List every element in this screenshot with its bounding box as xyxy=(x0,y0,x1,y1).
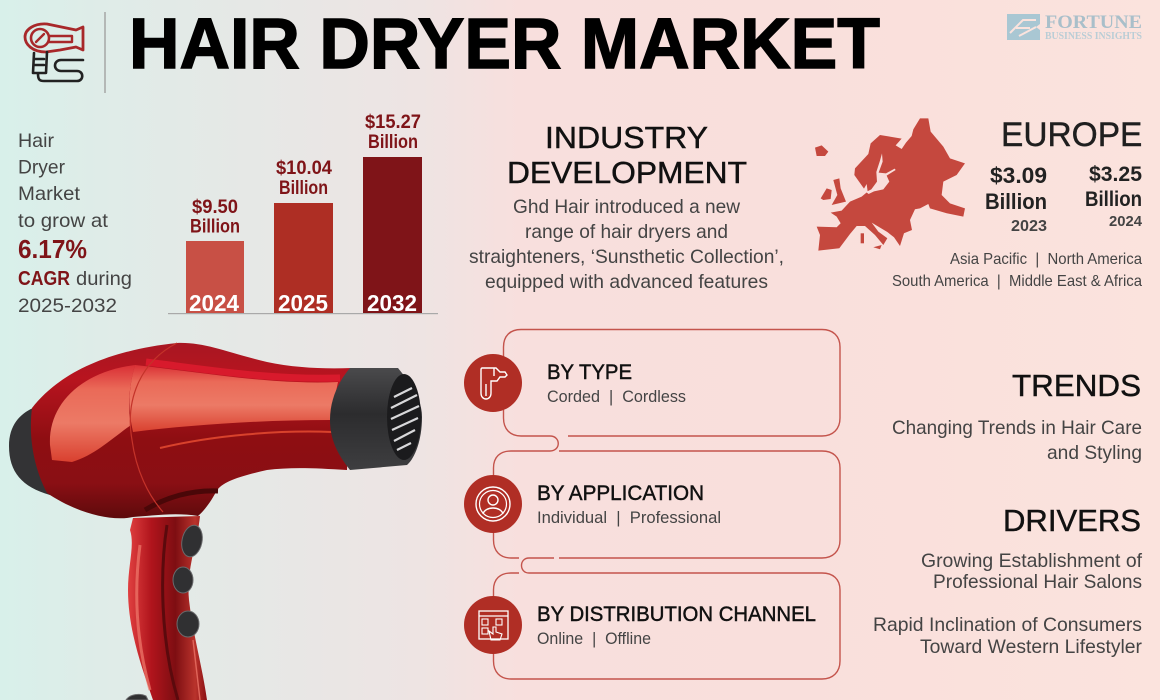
text block: CAGR statement: 2025-2032 xyxy=(18,295,117,317)
stat: Europe 2024: 2024 xyxy=(1109,213,1143,230)
icon: hair dryer logo xyxy=(25,24,83,81)
text block: CAGR statement: during xyxy=(76,268,132,290)
nozzle xyxy=(330,368,422,470)
text block: industry development description: Ghd Hair introduced a new xyxy=(513,196,741,218)
connected segment panels xyxy=(494,330,840,679)
text block: industry development description: range of hair dryers and xyxy=(525,221,728,243)
stat: Europe 2024 xyxy=(1085,163,1143,230)
text block: other regions: Asia Pacific | North America xyxy=(950,251,1142,268)
segment: by distribution channel xyxy=(464,596,816,654)
bar 2032: 2032 xyxy=(367,290,417,316)
panel: trends: and Styling xyxy=(1047,442,1142,464)
bar 2024: 2024 xyxy=(189,290,239,316)
text block: industry development description: equipped with advanced features xyxy=(485,271,768,293)
segment: by type: Corded | Cordless xyxy=(547,387,686,406)
panel: drivers: Toward Western Lifestyler xyxy=(920,636,1142,658)
text block: other regions xyxy=(892,251,1142,290)
illustration: red hair dryer xyxy=(9,343,422,700)
text block: CAGR statement: Market xyxy=(18,183,81,205)
bar 2032: $15.27 xyxy=(365,112,421,133)
heading: Europe: EUROPE xyxy=(1001,116,1142,154)
dryer body xyxy=(31,343,352,518)
bar 2025: $10.04 xyxy=(276,158,332,179)
bar 2025: Billion xyxy=(279,178,328,199)
text block: industry development description: straighteners, ‘Sunsthetic Collection’, xyxy=(469,246,784,268)
stat: Europe 2023: Billion xyxy=(985,189,1047,214)
bar 2024: $9.50 xyxy=(192,197,238,218)
stat: Europe 2023: $3.09 xyxy=(990,163,1047,188)
handle xyxy=(128,516,207,700)
bar 2025 xyxy=(274,158,333,316)
rear cap xyxy=(9,408,60,495)
panel: drivers: Rapid Inclination of Consumers xyxy=(873,614,1142,636)
segment: by type xyxy=(464,354,686,412)
text block: CAGR statement: CAGR xyxy=(18,268,70,290)
segment: by application: Individual | Professional xyxy=(537,508,721,527)
text block: CAGR statement: Dryer xyxy=(18,156,65,178)
heading: industry development: INDUSTRY xyxy=(545,120,708,155)
panel: drivers xyxy=(873,503,1143,658)
icon: corded dryer xyxy=(464,354,522,412)
text block: CAGR statement xyxy=(18,130,132,317)
logo: Fortune Business Insights: FORTUNE xyxy=(1045,12,1142,33)
map: Europe xyxy=(815,118,965,251)
text block: CAGR statement: to grow at xyxy=(18,210,109,232)
bar 2032 xyxy=(363,112,422,316)
bar 2024 xyxy=(186,197,244,316)
segment: by type: BY TYPE xyxy=(547,361,632,384)
segment: by distribution channel: Online | Offline xyxy=(537,629,651,648)
body reflections xyxy=(50,343,340,512)
title: HAIR DRYER MARKET xyxy=(129,4,880,83)
icon: online store grid xyxy=(464,596,522,654)
heading: industry development: DEVELOPMENT xyxy=(507,155,747,190)
panel: trends xyxy=(892,368,1142,464)
panel: trends: Changing Trends in Hair Care xyxy=(892,417,1142,439)
stat: Europe 2023 xyxy=(985,163,1047,235)
header divider xyxy=(104,12,106,93)
stat: Europe 2024: Billion xyxy=(1085,188,1142,211)
icon: person in circle xyxy=(464,475,522,533)
control buttons xyxy=(126,523,205,700)
logo: Fortune Business Insights xyxy=(1007,12,1142,42)
panel: drivers: Growing Establishment of xyxy=(921,550,1143,572)
bar 2025: 2025 xyxy=(278,290,328,316)
stat: Europe 2024: $3.25 xyxy=(1089,163,1142,186)
segment: by application xyxy=(464,475,721,533)
text block: CAGR statement: 6.17% xyxy=(18,234,87,264)
stat: Europe 2023: 2023 xyxy=(1011,218,1047,235)
bar 2032: Billion xyxy=(368,132,418,153)
text block: CAGR statement: Hair xyxy=(18,130,54,152)
panel: trends: TRENDS xyxy=(1012,368,1141,403)
text block: other regions: South America | Middle East & Africa xyxy=(892,273,1142,290)
panel: drivers: DRIVERS xyxy=(1003,503,1141,538)
text block: industry development description xyxy=(469,196,784,293)
segment: by application: BY APPLICATION xyxy=(537,482,704,505)
bar chart: market size xyxy=(168,112,438,316)
heading: industry development xyxy=(507,120,747,190)
logo: Fortune Business Insights: BUSINESS INSIGHTS xyxy=(1045,31,1142,42)
bar 2024: Billion xyxy=(190,216,240,238)
segment: by distribution channel: BY DISTRIBUTION CHANNEL xyxy=(537,603,816,626)
panel: drivers: Professional Hair Salons xyxy=(933,571,1142,593)
